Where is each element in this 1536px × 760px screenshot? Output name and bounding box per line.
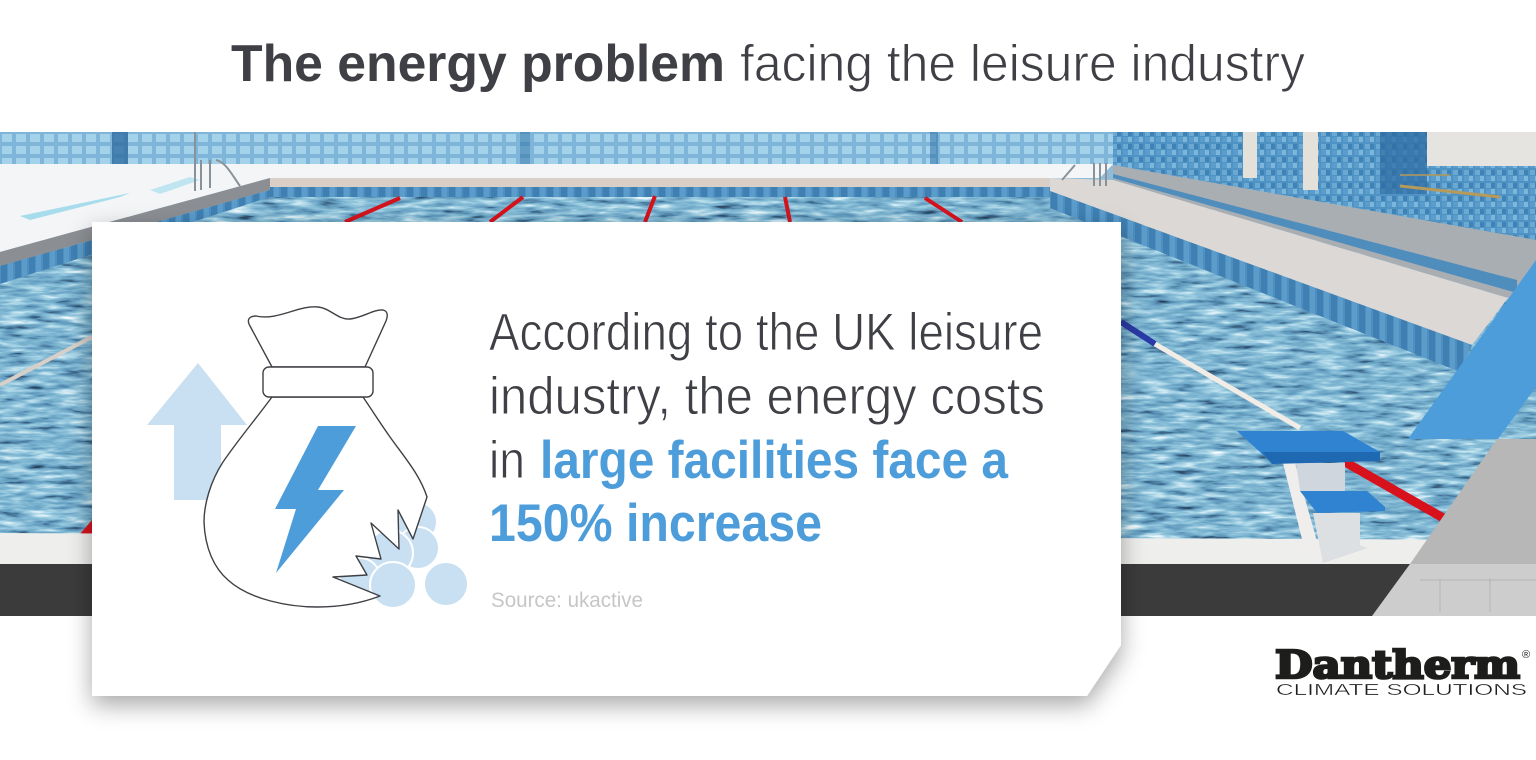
statement text: According to the UK leisure	[489, 303, 1043, 362]
statement text: large facilities face a	[540, 431, 1008, 490]
Dantherm logo: CLIMATE SOLUTIONS	[1276, 682, 1527, 699]
swimming pool photo background	[0, 132, 1536, 616]
source note: Source: ukactive	[491, 589, 643, 612]
Dantherm logo: ®	[1522, 649, 1530, 661]
left deck edge	[0, 178, 270, 266]
title: The energy problem	[231, 35, 725, 93]
decorative blue triangle	[1408, 260, 1536, 439]
title: facing the leisure industry	[740, 35, 1305, 93]
ladder left	[195, 132, 240, 191]
statement text: in	[489, 431, 525, 490]
icon: lightning bolt	[275, 426, 356, 573]
icon: rising arrow	[147, 363, 247, 500]
Dantherm logo: Dantherm	[1275, 642, 1520, 687]
decorative grey triangle	[1372, 439, 1536, 616]
white card panel	[92, 222, 1121, 696]
black strip	[0, 564, 1536, 616]
near deck	[0, 533, 1536, 565]
icon: coins spilling	[340, 502, 468, 608]
far lane ropes	[345, 196, 962, 222]
right deck	[1113, 165, 1536, 300]
lane ropes	[0, 337, 92, 385]
far deck	[0, 164, 1113, 252]
starting block	[1283, 463, 1316, 539]
statement text: industry, the energy costs	[489, 367, 1045, 426]
statement text	[489, 303, 1045, 553]
Dantherm logo	[1275, 642, 1530, 699]
statement text: 150% increase	[489, 494, 822, 553]
title	[231, 35, 1305, 93]
wall rail	[1400, 186, 1500, 197]
icon: torn money bag	[204, 307, 427, 607]
